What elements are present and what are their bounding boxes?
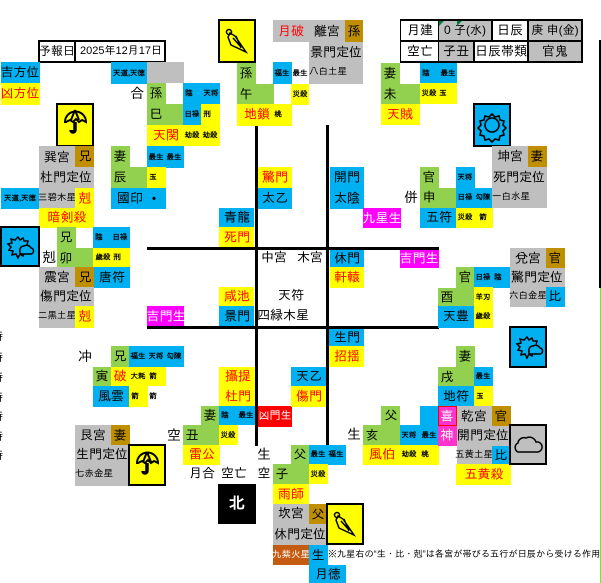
palace: north (坎宮): 九紫火星 <box>272 550 310 560</box>
northeast stem group: 福生 <box>130 352 146 360</box>
palace: southeast gates group: ● <box>152 194 156 202</box>
icon: sun behind cloud east <box>1 227 39 266</box>
southwest stem group: 申 <box>422 190 436 204</box>
gates left of center: 景門 <box>224 308 250 324</box>
gates lower right of center: 傷門 <box>296 388 322 404</box>
northwest stem group lower: 生 <box>347 426 361 442</box>
palace: southeast (巽宮): 天道,天徳 <box>4 194 37 202</box>
west stem group: 酉 <box>440 290 454 304</box>
gates right of center: 軒轅 <box>334 270 360 284</box>
palace: northeast (艮宮) <box>75 425 130 486</box>
palace: south (離宮): 離宮 <box>314 24 340 38</box>
northwest stem group upper: 地符 <box>443 388 469 404</box>
northwest stem group lower: 桃 <box>421 450 429 458</box>
palace: south (離宮): 景門定位 <box>310 44 362 60</box>
north-east lower stem group: 丑 <box>186 428 198 442</box>
northeast stem group: 勾陳 <box>166 352 182 360</box>
gates lower right of center: 招揺 <box>334 348 360 364</box>
palace: northwest (乾宮): 比 <box>494 448 508 462</box>
gates left of center: 吉門生 <box>146 308 186 324</box>
palace: southeast stem group: 刑 <box>203 110 211 118</box>
palace: west (兌宮): 比 <box>548 288 562 304</box>
east stem group <box>42 227 130 288</box>
southwest stem group <box>404 167 493 228</box>
palace: southeast stem group <box>111 62 220 146</box>
east stem group: 歳殺 <box>96 252 111 262</box>
north-east lower stem group: 災殺 <box>220 430 236 440</box>
southwest stem group top: 陰 <box>422 68 430 78</box>
north stem group: 最生 <box>310 450 326 458</box>
east stem group: 卯 <box>60 250 72 266</box>
northwest stem group lower: 天将 <box>402 430 417 440</box>
palace: south (離宮): 孫 <box>348 24 360 38</box>
center palace: 木宮 <box>297 250 323 264</box>
icon: closed umbrella north <box>327 504 363 544</box>
palace: southeast (巽宮): 剋 <box>78 190 92 206</box>
happy god marker: 神 <box>440 428 454 442</box>
gates lower left of center: 攝提 <box>225 368 251 384</box>
north-east lower stem group: 最生 <box>238 410 254 420</box>
palace: southeast stem group: 孫 <box>150 86 162 100</box>
palace: northwest (乾宮): 官 <box>494 408 508 424</box>
chart grid lines <box>147 40 601 583</box>
palace: southeast gates group: 玉 <box>149 172 157 182</box>
palace: east (震宮): 傷門定位 <box>40 288 92 304</box>
palace: southeast (巽宮): 暗剣殺 <box>48 210 86 224</box>
west stem group: 歳殺 <box>476 312 491 320</box>
southwest stem group top: 妻 <box>384 66 396 80</box>
north-east lower stem group: 陰 <box>221 410 229 420</box>
southwest stem group: 勾陳 <box>476 192 491 202</box>
gates left of center <box>146 287 254 326</box>
west stem group: 官 <box>458 270 472 284</box>
legend: lucky and unlucky directions: 凶方位 <box>0 86 40 100</box>
palace: north (坎宮): 月徳 <box>315 566 341 582</box>
north-east lower stem group: 月合 <box>189 466 215 480</box>
header: forecast date: 予報日 <box>39 44 75 58</box>
clipped time labels at left edge <box>0 329 3 462</box>
bad gate marker <box>258 406 292 427</box>
center palace: 四緑木星 <box>257 308 309 322</box>
palace: southeast (巽宮) <box>1 146 94 228</box>
southwest stem group: 日禄 <box>458 192 473 202</box>
center palace <box>257 250 323 322</box>
center palace: 天符 <box>278 288 304 302</box>
west stem group: 日禄 <box>476 272 491 282</box>
gates top right of center <box>330 167 402 228</box>
east stem group: 唐符 <box>99 270 125 284</box>
northwest stem group lower: 最生 <box>422 430 437 440</box>
palace: southeast (巽宮): 杜門定位 <box>40 170 92 184</box>
northeast stem group: 寅 <box>96 368 108 384</box>
gates top right of center: 九星生 <box>362 210 402 226</box>
header: day and month table: 日辰帯類 <box>475 44 527 58</box>
palace: southeast gates group: 國印 <box>117 190 143 206</box>
palace: southeast gates group: 妻 <box>114 148 126 164</box>
gates top right of center: 太陰 <box>334 190 360 206</box>
southwest stem group top <box>381 63 457 125</box>
palace: southeast gates group: 最生 <box>148 152 164 162</box>
gates top right of center: 開門 <box>334 170 360 184</box>
footnote: ※九星右の“生・比・剋”は各宮が帯びる五行が日辰から受ける作用 <box>328 549 600 559</box>
palace: southeast (巽宮): 三碧木星 <box>38 192 76 204</box>
south stem group: 災殺 <box>292 90 308 98</box>
north stem group: 雨師 <box>278 486 304 502</box>
east stem group: 陰 <box>95 232 103 242</box>
east stem group: 刑 <box>113 252 121 262</box>
northeast stem group: 風雲 <box>98 388 124 404</box>
gates lower right of center <box>291 329 364 407</box>
north stem group: 福生 <box>328 450 344 458</box>
north stem group: 父 <box>294 446 306 462</box>
palace: west (兌宮): 兌宮 <box>515 250 541 266</box>
palace: southeast stem group: 劫殺 <box>184 130 200 140</box>
palace: northwest (乾宮): 五黄土星 <box>455 450 493 460</box>
northeast stem group <box>78 346 184 407</box>
northwest stem group lower <box>347 406 439 465</box>
palace: south (離宮): 八白土星 <box>309 66 347 78</box>
northwest stem group upper: 最生 <box>476 372 491 380</box>
southwest stem group: 天将 <box>458 172 473 182</box>
header: day and month table: 日辰 <box>497 22 523 38</box>
palace: south (離宮) <box>273 20 363 84</box>
icon: cloud <box>510 425 546 464</box>
north compass marker <box>218 484 256 524</box>
palace: southeast stem group: 陰 <box>185 88 193 98</box>
palace: northwest (乾宮): 開門定位 <box>457 428 509 442</box>
palace: southeast gates group <box>111 146 184 209</box>
palace: northeast (艮宮): 生門定位 <box>76 446 128 462</box>
south stem group: 桃 <box>274 110 282 118</box>
northeast stem group: 天将 <box>148 352 164 360</box>
northeast stem group: 大耗 <box>130 372 146 380</box>
gates lower right of center: 生門 <box>334 330 360 344</box>
northwest stem group upper <box>438 346 493 406</box>
northwest stem group lower: 父 <box>384 408 398 422</box>
palace: north (坎宮): 休門定位 <box>274 526 326 542</box>
header: forecast date <box>39 41 165 62</box>
palace: southeast stem group: 劫殺 <box>202 130 218 140</box>
palace: south (離宮): 月破 <box>278 24 304 38</box>
center gates north of center <box>219 167 292 247</box>
header: day and month table <box>400 19 583 63</box>
south stem group: 地鎖 <box>244 106 270 122</box>
palace: northwest (乾宮) <box>455 406 511 485</box>
palace: southeast stem group: 合 <box>130 85 144 101</box>
palace: southwest (坤宮) <box>492 146 547 208</box>
palace: west (兌宮): 官 <box>548 250 562 266</box>
north-east lower stem group: 妻 <box>204 408 216 422</box>
icon: sun southwest <box>474 104 510 146</box>
gates right of center: 休門 <box>334 250 360 266</box>
west stem group: 陰 <box>494 272 502 282</box>
palace: northwest (乾宮): 五黄殺 <box>464 466 504 482</box>
south stem group: 孫 <box>240 66 252 80</box>
palace: east (震宮): 震宮 <box>44 270 70 284</box>
northeast stem group: 兄 <box>114 348 126 364</box>
palace: north (坎宮): 坎宮 <box>278 506 304 520</box>
southwest stem group top: 災殺 <box>422 88 437 98</box>
southwest stem group: 五符 <box>426 210 452 224</box>
palace: east (震宮) <box>38 267 94 328</box>
palace: west (兌宮): 驚門定位 <box>511 270 563 284</box>
palace: east (震宮): 剋 <box>78 308 92 324</box>
southwest stem group top: 天賊 <box>387 106 413 122</box>
happy god marker <box>438 406 457 446</box>
icon: open umbrella northwest <box>57 104 93 146</box>
palace: east (震宮): 兄 <box>78 270 92 284</box>
northwest stem group lower: 劫殺 <box>402 450 417 458</box>
palace: southeast stem group: 巳 <box>150 106 162 122</box>
bad gate marker: 凶門生 <box>258 410 292 422</box>
north compass marker: 北 <box>229 494 245 512</box>
center palace: 中宮 <box>261 250 287 264</box>
center gates north of center: 死門 <box>224 230 250 244</box>
icon: closed umbrella south <box>219 20 255 62</box>
north side labels: 生 <box>257 446 271 462</box>
center gates north of center: 青龍 <box>224 210 250 224</box>
southwest stem group top: 未 <box>384 86 396 102</box>
south stem group: 午 <box>240 86 252 102</box>
palace: northeast (艮宮): 七赤金星 <box>75 468 113 480</box>
palace: southeast (巽宮): 巽宮 <box>44 150 70 164</box>
header: day and month table: 月建 <box>407 22 433 38</box>
northeast stem group: 箭 <box>131 392 139 400</box>
header: day and month table: 0 子(水) <box>444 23 486 37</box>
icon: open umbrella northeast <box>129 445 165 485</box>
header: day and month table: 庚 申(金) <box>531 23 579 37</box>
palace: southeast stem group: 天関 <box>153 128 179 142</box>
southwest stem group top: 最生 <box>440 68 456 78</box>
west stem group: 羊刃 <box>476 292 490 302</box>
northwest stem group upper: 玉 <box>476 392 484 400</box>
palace: southeast (巽宮): 兄 <box>78 148 92 164</box>
southwest stem group top: 玉 <box>439 88 447 98</box>
header: day and month table: 子丑 <box>443 44 469 58</box>
icon: sun behind cloud west <box>510 327 546 367</box>
gates left of center: 咸池 <box>224 288 250 304</box>
header: forecast date: 2025年12月17日 <box>80 44 162 57</box>
center gates north of center: 驚門 <box>262 170 288 184</box>
palace: southeast stem group: 天道,天徳 <box>113 68 146 78</box>
palace: northeast (艮宮): 妻 <box>114 428 126 442</box>
palace: west (兌宮) <box>509 248 565 307</box>
west stem group: 天豊 <box>443 308 469 324</box>
east stem group: 日禄 <box>112 232 128 242</box>
east stem group: 剋 <box>42 249 56 265</box>
north side labels: 空亡 <box>221 466 247 480</box>
southwest stem group: 箭 <box>479 212 487 222</box>
legend: lucky and unlucky directions <box>0 62 40 105</box>
north stem group: 子 <box>276 466 288 482</box>
northeast stem group: 箭 <box>149 392 157 400</box>
north-east lower stem group <box>167 406 255 480</box>
north side labels <box>221 446 271 480</box>
happy god marker: 喜 <box>440 408 454 424</box>
palace: west (兌宮): 六白金星 <box>509 290 547 302</box>
legend: lucky and unlucky directions: 吉方位 <box>0 64 40 80</box>
palace: southwest (坤宮): 死門定位 <box>493 170 545 184</box>
palace: southwest (坤宮): 坤宮 <box>497 148 523 164</box>
palace: southwest (坤宮): 一白水星 <box>492 192 530 202</box>
header: day and month table: 官鬼 <box>542 44 568 58</box>
palace: northwest (乾宮): 乾宮 <box>461 408 487 424</box>
northwest stem group upper: 妻 <box>458 348 472 364</box>
northwest stem group upper: 戌 <box>440 370 454 384</box>
palace: southeast stem group: 天将 <box>204 88 219 98</box>
northeast stem group: 冲 <box>78 348 92 364</box>
northwest stem group lower: 風伯 <box>369 446 395 462</box>
south stem group: 福生 <box>274 68 290 78</box>
palace: north (坎宮): 生 <box>312 548 324 562</box>
southwest stem group: 併 <box>404 189 418 205</box>
palace: east (震宮): 二黒土星 <box>38 310 76 322</box>
palace: north (坎宮): 父 <box>312 506 324 522</box>
palace: southwest (坤宮): 妻 <box>530 148 544 164</box>
palace: southeast gates group: 辰 <box>114 170 126 184</box>
palace: southeast stem group: 日禄 <box>184 110 200 118</box>
palace: southeast gates group: 最生 <box>166 152 182 162</box>
east stem group: 兄 <box>60 230 72 244</box>
north-east lower stem group: 雷公 <box>189 446 215 462</box>
north-east lower stem group: 空 <box>167 427 181 443</box>
palace: north (坎宮) <box>272 504 346 583</box>
north side labels: 空 <box>258 466 270 480</box>
south stem group: 最生 <box>292 68 308 78</box>
south stem group <box>237 62 309 126</box>
north stem group <box>273 445 346 504</box>
northeast stem group: 破 <box>114 368 126 384</box>
north stem group: 災殺 <box>310 470 326 478</box>
center gates north of center: 太乙 <box>262 190 288 206</box>
palace: northeast (艮宮): 艮宮 <box>80 428 106 442</box>
gates right of center <box>330 250 439 288</box>
northwest stem group lower: 亥 <box>366 428 378 442</box>
gates lower right of center: 天乙 <box>296 368 322 384</box>
northeast stem group: 箭 <box>149 372 157 380</box>
southwest stem group: 災殺 <box>458 212 473 222</box>
southwest stem group: 官 <box>422 170 436 184</box>
header: day and month table: 空亡 <box>407 44 433 58</box>
gates lower left of center <box>219 367 255 406</box>
gates right of center: 吉門生 <box>400 250 438 266</box>
gates lower left of center: 杜門 <box>225 388 251 404</box>
west stem group <box>438 267 510 328</box>
